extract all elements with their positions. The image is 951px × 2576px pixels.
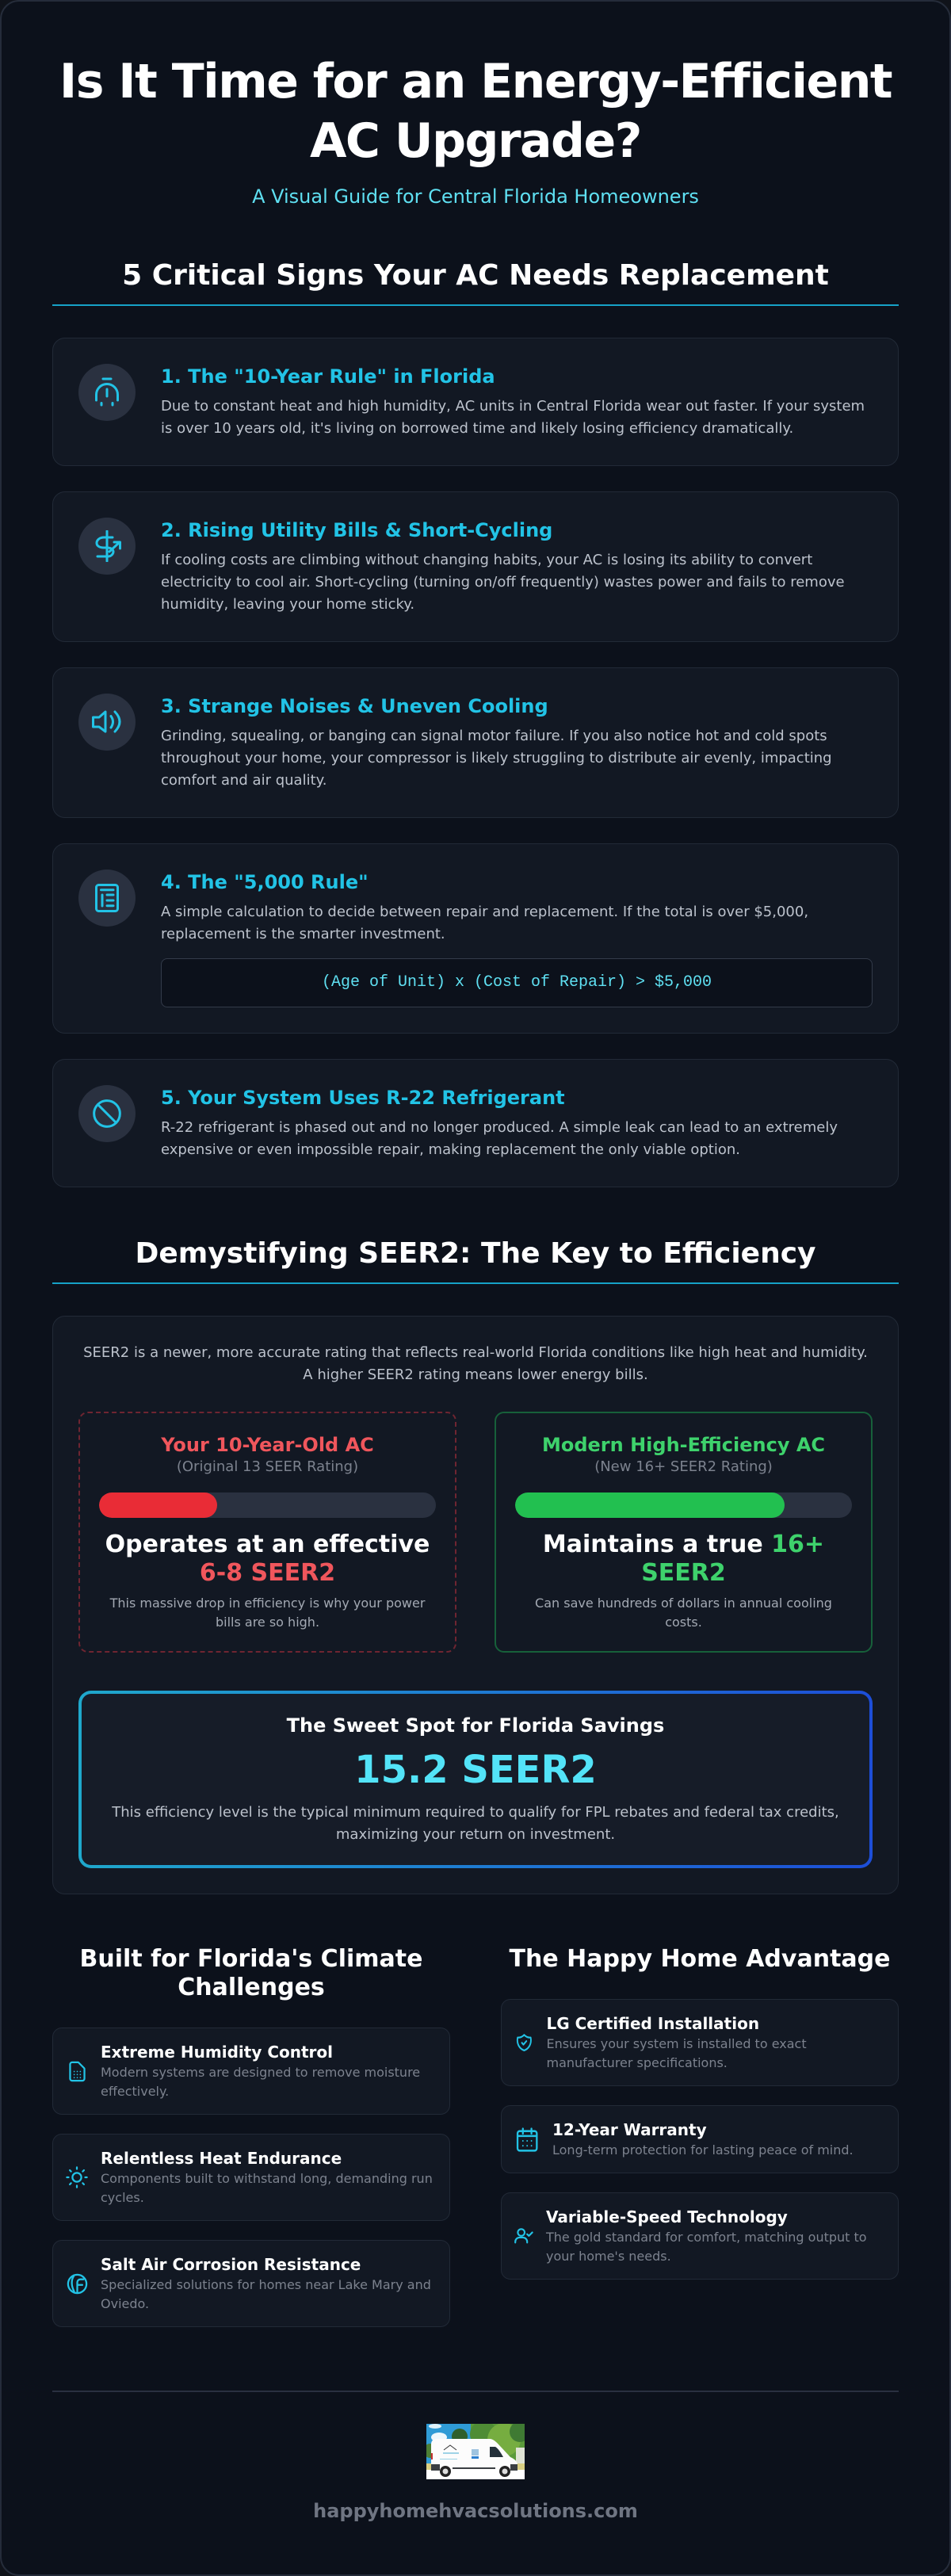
panel: sign 5 [52,1059,899,1187]
rating: modern AC: (New 16+ SEER2 Rating) [594,1458,773,1475]
text: humidity: effectively. [101,2084,169,2099]
value: modern AC SEER2 [543,1531,824,1587]
note: old AC: This massive drop in efficiency is why your power [110,1596,425,1611]
panel: old AC comparison [78,1412,456,1653]
panel: sign 4 [52,843,899,1034]
text: variable speed: Variable-Speed Technology [546,2207,788,2226]
text: heat [101,2149,433,2205]
note: modern AC: Can save hundreds of dollars in annual cooling [535,1596,832,1611]
heading: SEER2: Demystifying SEER2: The Key to Efficiency [135,1237,816,1270]
value: modern AC SEER2: SEER2 [641,1559,726,1587]
icon: thermostat [78,364,136,421]
card: salt air [52,2240,450,2327]
text: SEER2 intro: SEER2 is a newer, more accurate rating that reflects real-world Florida conditions like high heat and humidity. [83,1344,868,1361]
text: sign 5 [161,1087,838,1158]
label: old AC: Your 10-Year-Old AC [161,1434,374,1456]
text: sign 4: replacement is the smarter investment. [161,926,445,942]
heading: climate challenges: Challenges [178,1974,325,2001]
callout text: This efficiency level is the typical minimum required to qualify for FPL rebates and federal tax credits, [112,1804,839,1821]
formula box [161,958,873,1007]
text: LG install: manufacturer specifications. [547,2055,728,2070]
icon: person check [514,2228,533,2243]
text: heat: cycles. [101,2190,144,2205]
icon: calculation sheet [78,869,136,927]
text: sign 2: humidity, leaving your home sticky. [161,596,414,613]
value: old AC effective SEER2 [105,1531,430,1587]
callout value: 15.2 SEER2 [354,1748,597,1792]
heading: 5 critical signs: 5 Critical Signs Your AC Needs Replacement [122,259,829,292]
heading: SEER2 [52,1238,899,1284]
icon: document [69,2061,86,2081]
text: salt air: Oviedo. [101,2296,149,2311]
text: humidity [101,2043,420,2099]
text: sign 1: is over 10 years old, it's living on borrowed time and likely losing efficiency dramatically. [161,420,793,437]
value: old AC effective SEER2: 6-8 SEER2 [200,1559,335,1587]
text: sign 3: Grinding, squealing, or banging can signal motor failure. If you also notice hot and cold spots [161,728,827,744]
text: heat: Relentless Heat Endurance [101,2149,342,2168]
text: salt air: Salt Air Corrosion Resistance [101,2255,361,2274]
bar: modern AC efficiency [515,1492,852,1518]
callout heading: The Sweet Spot for Florida Savings [287,1714,664,1737]
heading: advantage: The Happy Home Advantage [510,1945,890,1973]
text: warranty: 12-Year Warranty [552,2120,707,2139]
text: salt air: Specialized solutions for homes near Lake Mary and [101,2277,431,2292]
callout text [112,1804,839,1843]
callout: sweet spot [78,1691,873,1868]
title [59,54,892,169]
text: variable speed [545,2207,867,2264]
text: sign 5: expensive or even impossible repair, making replacement the only viable option. [161,1141,740,1158]
panel: modern AC comparison [495,1412,873,1653]
text: sign 4 [161,871,873,1007]
image: service van logo [426,2424,525,2479]
text: sign 5: 5. Your System Uses R-22 Refrigerant [161,1087,565,1109]
card: humidity [52,2028,450,2115]
text: sign 5: R-22 refrigerant is phased out and no longer produced. A simple leak can lead to an extremely [161,1119,838,1136]
footer url: happyhomehvacsolutions.com [313,2500,638,2522]
heading: climate challenges: Built for Florida's Climate [80,1945,422,1973]
icon: speaker [78,694,136,751]
text: sign 2: electricity to cool air. Short-cycling (turning on/off frequently) wastes power and fails to remove [161,574,845,590]
icon: globe [67,2273,87,2294]
card: heat [52,2134,450,2221]
subtitle: A Visual Guide for Central Florida Homeowners [252,185,699,208]
text: sign 4: 4. The "5,000 Rule" [161,871,369,893]
text: variable speed: The gold standard for comfort, matching output to [546,2230,867,2245]
text: LG install: Ensures your system is installed to exact [547,2036,807,2051]
text: humidity: Modern systems are designed to remove moisture [101,2065,420,2080]
note: old AC: bills are so high. [216,1615,319,1630]
text: LG install: LG Certified Installation [547,2014,759,2033]
text: warranty: Long-term protection for lasting peace of mind. [552,2142,854,2157]
label: modern AC: Modern High-Efficiency AC [542,1434,825,1456]
card: warranty [501,2105,899,2173]
text: sign 2: 2. Rising Utility Bills & Short-Cycling [161,519,552,541]
text: SEER2 intro: A higher SEER2 rating means lower energy bills. [303,1366,648,1383]
callout text: maximizing your return on investment. [336,1826,615,1843]
icon: sun [66,2166,88,2188]
text: sign 1: Due to constant heat and high humidity, AC units in Central Florida wear out faster. If your system [161,398,865,415]
text: sign 3 [161,695,832,789]
text: sign 4: A simple calculation to decide between repair and replacement. If the total is over $5,000, [161,904,808,920]
text: LG install [547,2014,807,2070]
text: variable speed: your home's needs. [546,2249,671,2264]
panel: sign 1 [52,338,899,466]
text: sign 3: 3. Strange Noises & Uneven Cooling [161,695,548,717]
card: LG install [501,1999,899,2086]
text: sign 1: 1. The "10-Year Rule" in Florida [161,365,495,388]
icon: prohibited [78,1085,136,1142]
note: old AC [109,1596,425,1630]
value: old AC effective SEER2: Operates at an effective [105,1531,430,1558]
panel: sign 3 [52,667,899,818]
panel: SEER2 background [52,1316,899,1894]
footer rule [52,2391,899,2392]
text: sign 2: If cooling costs are climbing without changing habits, your AC is losing its ability to convert [161,552,812,568]
title: Is It Time for an Energy-Efficient [59,54,892,109]
text: SEER2 intro [83,1344,868,1383]
heading: climate challenges [80,1945,422,2001]
text: sign 3: comfort and air quality. [161,772,327,789]
card: variable speed [501,2192,899,2280]
text: sign 2 [161,519,845,613]
bar: old AC efficiency [99,1492,436,1518]
text: sign 3: throughout your home, your compressor is likely struggling to distribute air evenly, impacting [161,750,832,766]
note: modern AC: costs. [665,1615,702,1630]
text: sign 1 [161,365,865,437]
heading: 5 critical signs [52,260,899,306]
note: modern AC [535,1596,832,1630]
value: modern AC SEER2: Maintains a true 16+ [543,1531,824,1558]
title: AC Upgrade? [310,113,641,169]
rating: old AC: (Original 13 SEER Rating) [177,1458,358,1475]
text: salt air [101,2255,431,2311]
text: heat: Components built to withstand long, demanding run [101,2171,433,2186]
icon: calendar [517,2127,537,2152]
icon: dollar with rising arrow [78,518,136,575]
icon: shield check [517,2034,532,2051]
panel: sign 2 [52,491,899,642]
text: warranty [552,2120,854,2157]
text: humidity: Extreme Humidity Control [101,2043,333,2062]
formula box: (Age of Unit) x (Cost of Repair) > $5,000 [322,973,712,992]
